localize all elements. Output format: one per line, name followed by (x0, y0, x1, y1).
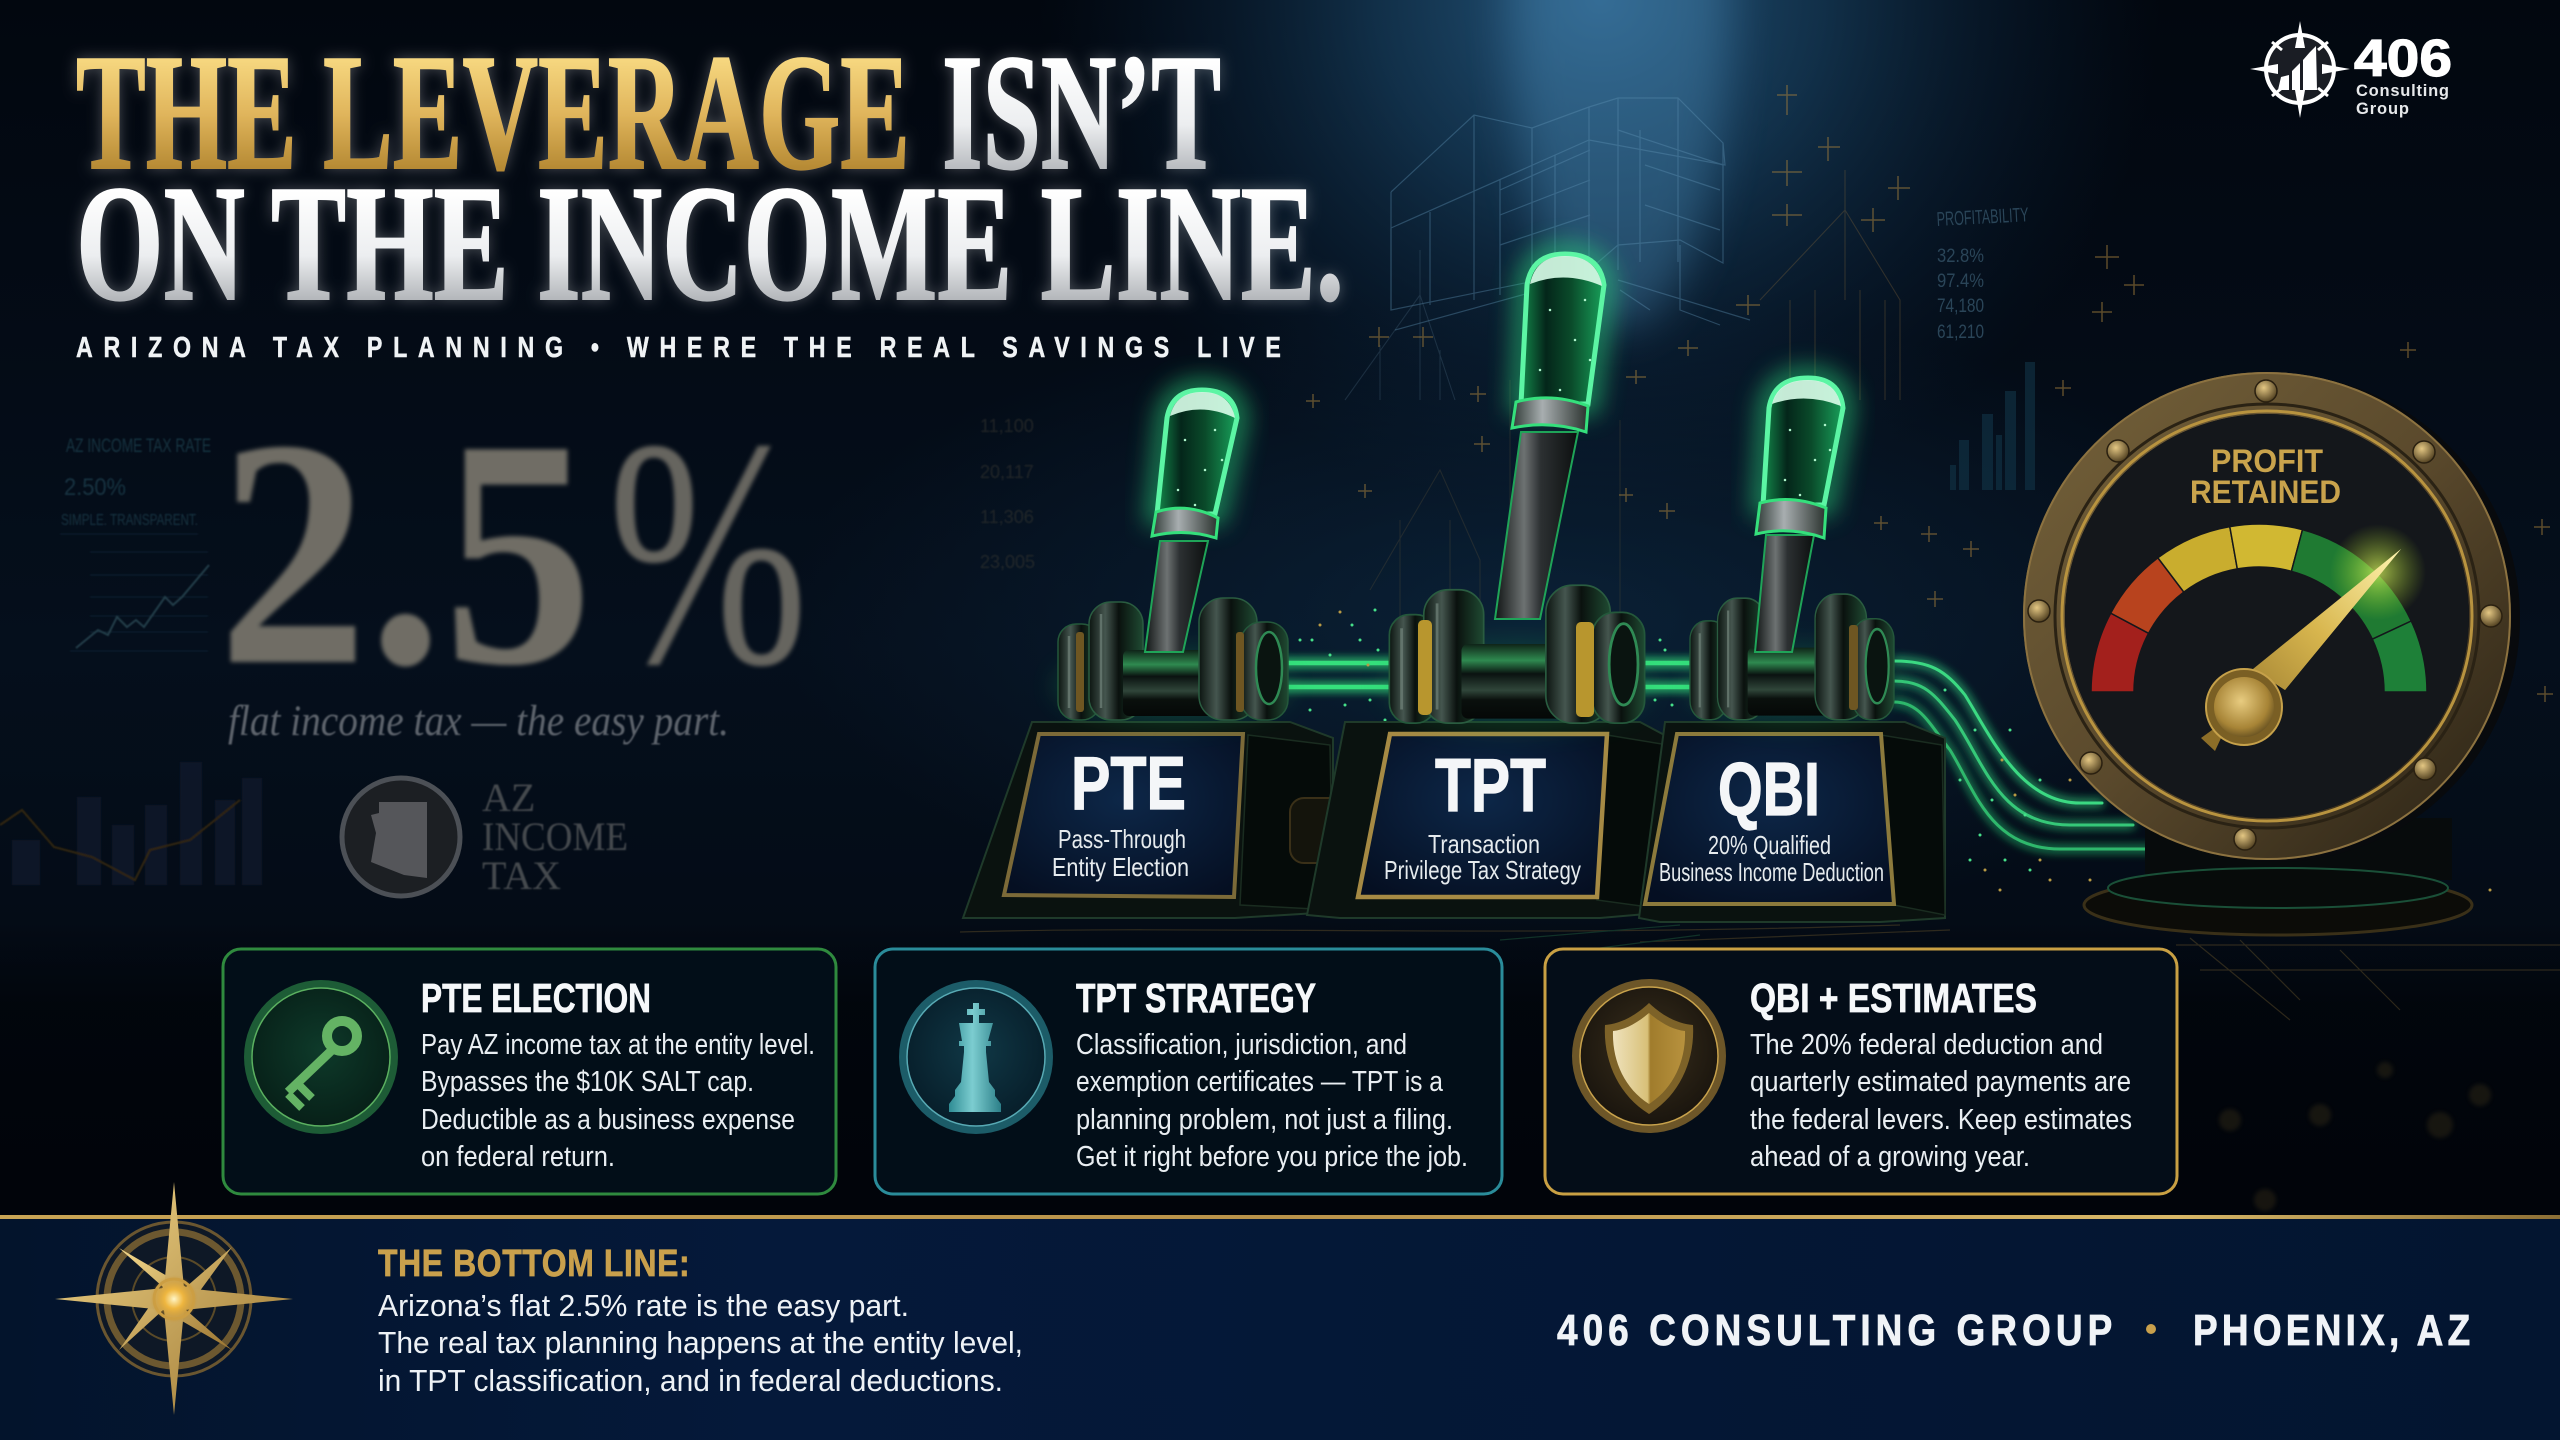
lever 1 glass handle (1157, 390, 1237, 514)
card: PTE election: on federal return. (421, 1141, 615, 1173)
card: TPT strategy: TPT STRATEGY (1076, 975, 1316, 1021)
card: QBI + estimates (1545, 949, 2177, 1194)
green connector tubes (1270, 661, 2156, 849)
gauge arc segments (2091, 524, 2427, 692)
faint numbers behind levers (980, 416, 1035, 572)
lever 3 collar (1756, 499, 1826, 538)
location: PHOENIX, AZ (2193, 1305, 2470, 1355)
faint left data panel: SIMPLE. TRANSPARENT. (61, 512, 198, 529)
faint left data panel: AZ INCOME TAX RATE (66, 436, 211, 457)
faint data panel: profitability: 74,180 (1937, 296, 1984, 317)
gauge face (2065, 414, 2469, 818)
card: TPT strategy (875, 949, 1502, 1194)
card: QBI + estimates: The 20% federal deduction and (1750, 1029, 2103, 1061)
lever 1 hub (1053, 598, 1293, 726)
card: QBI + estimates: ahead of a growing year. (1750, 1141, 2030, 1173)
big rate: 2.5% (218, 373, 808, 733)
faint numbers behind levers: 11,100 (980, 416, 1034, 436)
lever 3 hub (1686, 594, 1898, 726)
lever 2 specks (1540, 300, 1590, 390)
plaque text: PTE: PTE (1071, 741, 1186, 825)
lever 3 glow (1763, 378, 1843, 505)
lever 1 shaft (1145, 541, 1208, 652)
bottom line text (378, 1242, 1023, 1398)
AZ income tax label (482, 775, 628, 898)
faint numbers behind levers: 11,306 (980, 507, 1034, 527)
gauge label (2190, 443, 2341, 510)
bottom line text: The real tax planning happens at the entity level, (378, 1325, 1023, 1360)
lever 1: PTE (963, 390, 1346, 918)
card: TPT strategy: Get it right before you price the job. (1076, 1141, 1468, 1173)
card: QBI + estimates: quarterly estimated payments are (1750, 1066, 2131, 1098)
gauge needle (2201, 524, 2426, 751)
lever 1 specks (1178, 430, 1222, 505)
lever 3 gold band (1849, 625, 1858, 710)
lever 1 gold bands (1076, 632, 1244, 712)
blueprint towers (1345, 170, 1900, 620)
plaque text: TPT: Privilege Tax Strategy (1384, 855, 1581, 885)
faint bar chart near gauge (1950, 362, 2035, 490)
lever 3: QBI (1639, 378, 1945, 922)
AZ income tax label: INCOME (482, 814, 628, 859)
lever 2 base (1307, 722, 1670, 918)
bottom line heading: THE BOTTOM LINE: (378, 1242, 690, 1285)
separator dot (2146, 1324, 2156, 1334)
gauge stand (2084, 818, 2472, 935)
lever 3 specks (1785, 425, 1830, 495)
lever 2 gold bands (1418, 620, 1594, 717)
lever 1 glow (1157, 390, 1237, 514)
card: PTE election: PTE ELECTION (421, 975, 651, 1021)
gauge hub (2206, 669, 2282, 745)
AZ income tax label: TAX (482, 853, 561, 898)
icon: compass star (55, 1182, 293, 1415)
faint numbers behind levers: 20,117 (980, 462, 1034, 482)
icon: Arizona seal (342, 778, 460, 896)
card: QBI + estimates: QBI + ESTIMATES (1750, 975, 2037, 1021)
card: TPT strategy: Classification, jurisdiction, and (1076, 1029, 1407, 1061)
card: PTE election: Bypasses the $10K SALT cap. (421, 1066, 754, 1098)
logo: 406 Consulting Group: Consulting (2356, 82, 2449, 100)
title: ISN’T (942, 20, 1221, 204)
big rate: 2.5%: % (608, 373, 808, 733)
icon: key (244, 980, 398, 1134)
logo: 406 Consulting Group: 406 (2354, 30, 2452, 88)
logo mark (2250, 21, 2350, 118)
faint left data panel (0, 436, 262, 885)
faint left data panel: 2.50% (64, 474, 126, 501)
plaque text: QBI (1659, 747, 1884, 887)
big rate: 2.5%: 2.5 (218, 373, 593, 733)
faint data panel: profitability: 97.4% (1937, 271, 1984, 292)
card: TPT strategy: exemption certificates — TPT is a (1076, 1066, 1443, 1098)
lever 2 glass handle (1521, 254, 1604, 404)
lever 3 handle cap (1772, 380, 1841, 406)
plaque text: QBI: Business Income Deduction (1659, 857, 1884, 887)
rate caption: flat income tax — the easy part. (228, 698, 729, 745)
gauge: profit retained (2024, 373, 2520, 935)
lever 1 collar (1152, 508, 1218, 538)
bottom line text: Arizona’s flat 2.5% rate is the easy part. (378, 1288, 909, 1323)
plaque text: PTE: Entity Election (1052, 852, 1189, 882)
lever 2 shaft (1495, 432, 1578, 619)
plaque text: TPT: Transaction (1428, 829, 1540, 859)
gauge bolts (2028, 380, 2502, 850)
card: TPT strategy: planning problem, not just a filing. (1076, 1104, 1453, 1136)
icon: shield (1572, 979, 1726, 1133)
plaque text: QBI: QBI (1718, 747, 1820, 831)
icon: chess king (899, 980, 1053, 1134)
gauge label: RETAINED (2190, 474, 2341, 510)
title: THE LEVERAGE (76, 20, 910, 204)
lever 2 collar (1512, 398, 1588, 432)
floor grid (960, 925, 2560, 1020)
card: PTE election (223, 949, 836, 1194)
plaque text: QBI: 20% Qualified (1708, 830, 1831, 860)
gauge bezel (2024, 373, 2520, 862)
title (76, 20, 1344, 335)
bottom line text: in TPT classification, and in federal deductions. (378, 1363, 1003, 1398)
lever 2: TPT (1307, 254, 1670, 918)
plaque text: TPT (1384, 743, 1581, 885)
footer brand line (1557, 1305, 2470, 1355)
lever 3 shaft (1755, 535, 1814, 652)
card: PTE election: Deductible as a business expense (421, 1104, 795, 1136)
lever 1 handle cap (1170, 392, 1235, 418)
lever 2 hub (1384, 585, 1650, 730)
faint numbers behind levers: 23,005 (980, 552, 1035, 572)
plaque text: TPT: TPT (1435, 743, 1546, 827)
brand name: 406 CONSULTING GROUP (1557, 1305, 2112, 1355)
card: PTE election: Pay AZ income tax at the entity level. (421, 1029, 815, 1061)
lever 3 glass handle (1763, 378, 1843, 505)
card: QBI + estimates: the federal levers. Keep estimates (1750, 1104, 2132, 1136)
plaque text: PTE (1052, 741, 1189, 882)
faint gold cross marks (1306, 85, 2553, 883)
gauge label: PROFIT (2211, 443, 2323, 479)
lever 1 base (963, 722, 1346, 918)
footer band (0, 1215, 2560, 1440)
faint gold bokeh (2219, 1062, 2491, 1211)
subtitle: ARIZONA TAX PLANNING • WHERE THE REAL SAVINGS LIVE (76, 330, 1281, 364)
logo: 406 Consulting Group: Group (2356, 100, 2409, 118)
AZ income tax label: AZ (482, 775, 535, 820)
faint data panel: profitability: 61,210 (1937, 322, 1984, 343)
logo: 406 Consulting Group (2250, 21, 2452, 118)
faint data panel: profitability (1936, 204, 2029, 343)
plaque text: PTE: Pass-Through (1058, 824, 1186, 854)
title: ON THE INCOME LINE. (76, 151, 1344, 335)
sparks around connectors (1300, 610, 2490, 905)
lever 2 glow (1521, 254, 1604, 404)
lever 2 handle cap (1530, 256, 1602, 286)
faint data panel: profitability: 32.8% (1937, 246, 1984, 267)
lever 3 base (1639, 722, 1945, 922)
blueprint building backdrop (1391, 98, 1750, 330)
faint data panel: profitability: PROFITABILITY (1936, 204, 2029, 231)
